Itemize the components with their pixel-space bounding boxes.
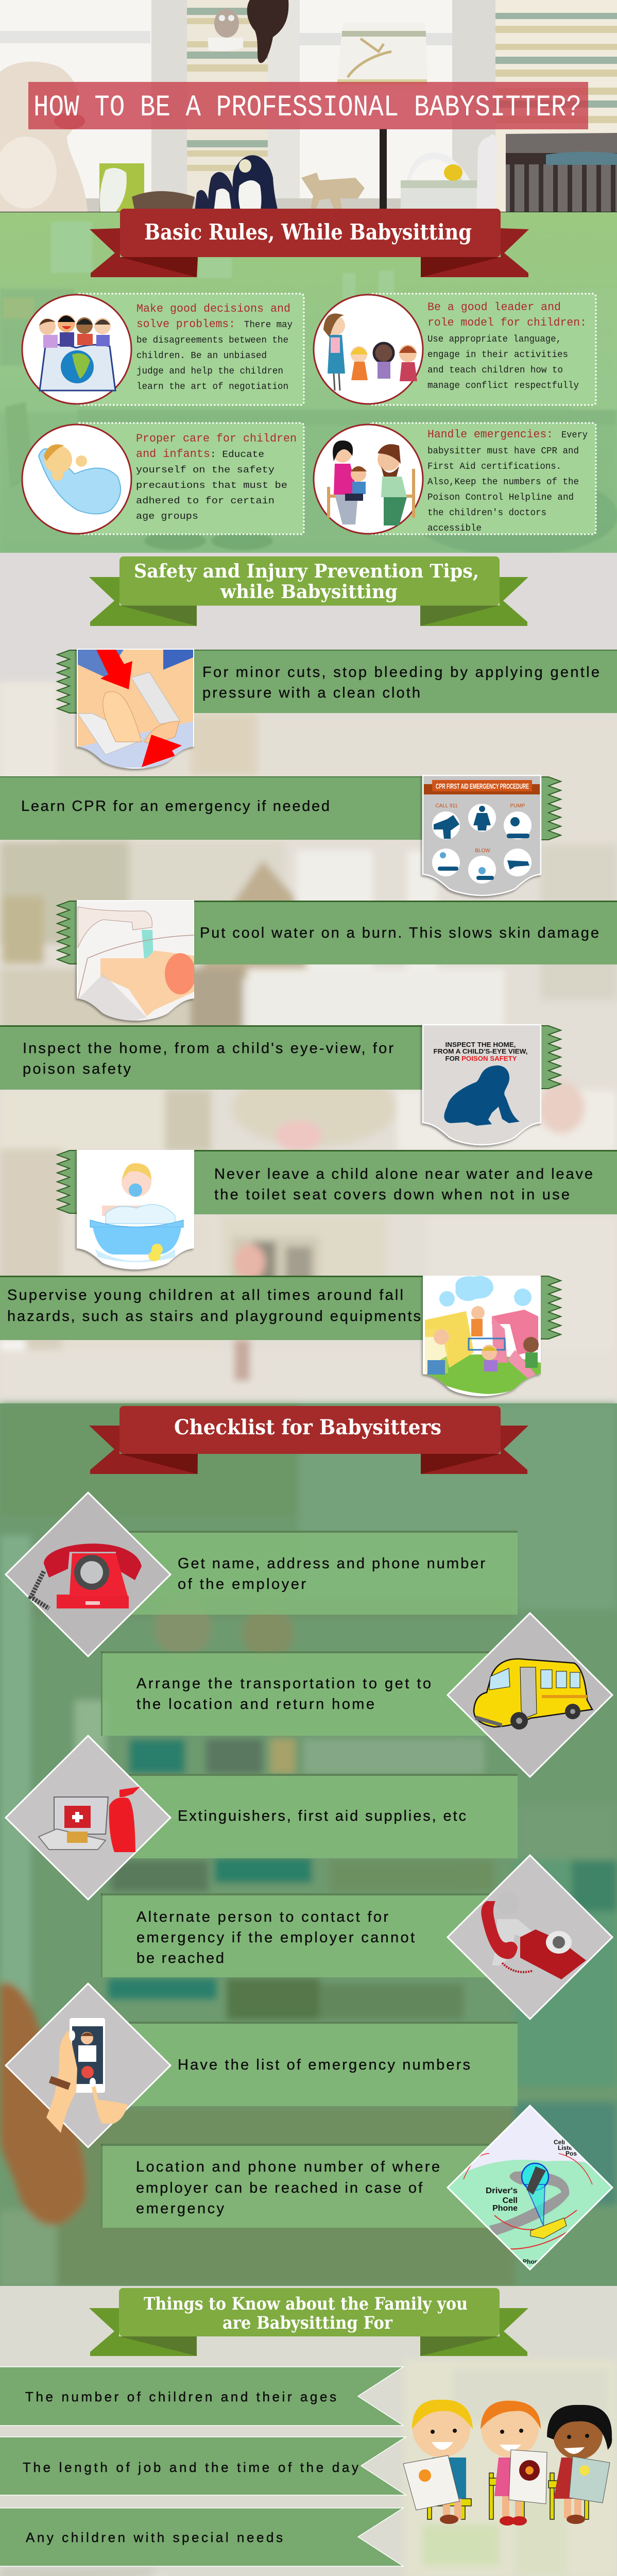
icon: crawling baby card: INSPECT THE HOME,: [445, 1041, 516, 1048]
rule text: Every: [561, 430, 588, 440]
ribbon: basic rules: Basic Rules, While Babysitting: [144, 219, 472, 245]
rule text: yourself on the safety: [136, 465, 275, 476]
section background: checklist: [0, 1403, 617, 2286]
lamp: [337, 23, 427, 212]
icon: cell phone tracking map: Cell: [503, 2196, 518, 2205]
checklist row: alternate contact: be reached: [136, 1950, 224, 1967]
rule text: and infants: [136, 448, 210, 461]
tip: minor cuts: For minor cuts, stop bleeding by applying gentle: [202, 664, 599, 681]
polar bear toy: [0, 62, 88, 212]
icon: crawling baby card: FOR POISON SAFETY: [445, 1055, 517, 1062]
ribbon: safety tips: Safety and Injury Prevention Tips,: [134, 561, 479, 582]
rule text: Handle emergencies:: [427, 428, 553, 441]
checklist row: alternate contact: [101, 1855, 612, 2019]
family bar: children: [0, 2367, 403, 2426]
icon: CPR procedure card: [423, 775, 541, 895]
icon: cell phone tracking map: Cell: [554, 2139, 565, 2146]
icon: CPR procedure card: CALL 911: [435, 803, 458, 809]
rule text: the children's doctors: [427, 508, 546, 518]
panel: be a good leader: [314, 294, 596, 405]
icon: children with globe book: [22, 295, 131, 404]
checklist row: employer details: of the employer: [178, 1576, 306, 1592]
tip: poison safety: [0, 1025, 561, 1145]
icon: cell phone tracking map: [443, 2106, 617, 2272]
rule text: There may: [244, 320, 293, 330]
panel: proper care: [22, 423, 304, 534]
hero photo: nursery window: [0, 0, 617, 212]
rule text: [427, 428, 588, 534]
checklist row: emergency numbers: [6, 1984, 518, 2147]
icon: figure with red phone: [448, 1855, 612, 2019]
family bar: job length: The length of job and the time of the day: [23, 2460, 358, 2475]
checklist row: alternate contact: Alternate person to contact for: [136, 1909, 388, 1925]
rule text: Be a good leader and: [427, 301, 561, 314]
icon: swaddled baby: [22, 425, 131, 534]
crib: [506, 133, 617, 212]
rule text: judge and help the children: [136, 366, 283, 377]
icon: cell phone tracking map: Phone: [492, 2204, 518, 2213]
rule text: age groups: [136, 512, 198, 522]
left stack of toys: [99, 163, 195, 212]
ribbon: checklist: Checklist for Babysitters: [174, 1415, 441, 1439]
tip: minor cuts: [57, 649, 617, 769]
icon: hand with phone calling doctor: [6, 1984, 170, 2147]
rule text: and teach children how to: [427, 365, 563, 376]
checklist row: transportation: the location and return home: [136, 1696, 374, 1713]
icon: cell phone tracking map: Liste: [558, 2144, 572, 2151]
checklist row: alternate contact: emergency if the employer cannot: [136, 1929, 415, 1946]
checklist row: employer details: [6, 1493, 518, 1656]
rule text: be disagreements between the: [136, 335, 288, 346]
icon: cell phone tracking map: Pos: [565, 2150, 577, 2157]
rule text: solve problems:: [136, 318, 235, 331]
rule text: children. Be an unbiased: [136, 351, 267, 361]
family bar: special needs: [0, 2508, 403, 2566]
icon: bandaging hand card: [77, 649, 194, 769]
rule text: Poison Control Helpline and: [427, 493, 574, 503]
rule text: Use appropriate language,: [427, 334, 561, 345]
tip: poison safety: Inspect the home, from a child's eye-view, for: [23, 1040, 393, 1057]
section background: safety tips: [0, 553, 617, 1403]
ribbon: family: Things to Know about the Family you: [144, 2294, 468, 2314]
family bar: children: The number of children and their ages: [25, 2389, 336, 2404]
rule text: adhered to for certain: [136, 496, 275, 506]
rule text: Proper care for children: [136, 432, 297, 445]
icon: first aid kit and extinguisher: [6, 1736, 170, 1900]
rule text: babysitter must have CPR and: [427, 446, 579, 456]
section background: basic rules: [0, 212, 617, 556]
illustration: three children with drawings: [403, 2400, 612, 2526]
rule text: engage in their activities: [427, 350, 568, 360]
icon: school bus: [448, 1613, 612, 1777]
ribbon: family: [89, 2288, 528, 2356]
basket and duck: [401, 152, 478, 212]
icon: crawling baby card: [423, 1025, 541, 1145]
tip: CPR: [0, 775, 561, 895]
tip: burn: Put cool water on a burn. This slows skin damage: [200, 925, 599, 941]
monkey toy: [247, 0, 288, 63]
tip: poison safety: poison safety: [23, 1061, 131, 1077]
tip: burn: [57, 900, 617, 1021]
icon: crawling baby card: FROM A CHILD'S-EYE VIEW,: [434, 1047, 527, 1055]
rabbit toy: [476, 134, 497, 212]
checklist row: emergency numbers: Have the list of emergency numbers: [178, 2057, 470, 2073]
rule text: precautions that must be: [136, 481, 287, 491]
panel: handle emergencies: [314, 423, 596, 534]
family bar: special needs: Any children with special needs: [26, 2530, 283, 2545]
tip: minor cuts: pressure with a clean cloth: [202, 685, 420, 701]
checklist row: employer details: Get name, address and phone number: [178, 1555, 485, 1572]
tip: fall hazards: Supervise young children at all times around fall: [7, 1287, 403, 1303]
section background: family: [0, 2286, 617, 2576]
ribbon: family: are Babysitting For: [222, 2313, 393, 2333]
icon: CPR procedure card: PUMP: [510, 803, 525, 809]
panel: make good decisions: [22, 294, 304, 405]
icon: doctor with mother and child: [314, 425, 423, 534]
icon: red telephone: [6, 1493, 170, 1656]
rule text: manage conflict respectfully: [427, 381, 579, 391]
checklist row: transportation: [101, 1613, 612, 1777]
penguins: [195, 155, 278, 212]
ribbon: safety tips: while Babysitting: [220, 581, 398, 603]
rule text: [427, 301, 587, 391]
ribbon: safety tips: [89, 556, 528, 626]
icon: cell phone tracking map: Phon: [523, 2258, 538, 2265]
rule text: [136, 432, 297, 522]
checklist row: employer location: employer can be reached in case of: [136, 2180, 423, 2196]
icon: playground card: [423, 1276, 541, 1397]
rule text: Also,Keep the numbers of the: [427, 477, 579, 487]
owl toy on shelf: [208, 9, 243, 51]
rule text: accessible: [427, 523, 482, 534]
icon: cell phone tracking map: Driver's: [486, 2187, 518, 2195]
checklist row: extinguishers: [6, 1736, 518, 1900]
icon: CPR procedure card: BLOW: [475, 848, 490, 854]
checklist row: employer location: emergency: [136, 2200, 225, 2217]
family bar: job length: [0, 2437, 406, 2495]
icon: teacher and pupils: [314, 295, 423, 404]
checklist row: transportation: Arrange the transportation to get to: [136, 1675, 431, 1692]
ribbon: basic rules: [90, 209, 529, 277]
goat toy: [301, 173, 365, 212]
checklist row: extinguishers: Extinguishers, first aid supplies, etc: [178, 1808, 466, 1824]
icon: baby in bathtub card: [77, 1150, 194, 1269]
tip: water safety: Never leave a child alone near water and leave: [214, 1166, 593, 1182]
tip: water safety: the toilet seat covers down when not in use: [214, 1187, 570, 1203]
icon: CPR procedure card: CPR FIRST AID EMERGENCY PROCEDURE: [436, 782, 529, 791]
tip: fall hazards: hazards, such as stairs and playground equipments: [7, 1308, 421, 1325]
rule text: Make good decisions and: [136, 302, 290, 315]
tip: fall hazards: [0, 1276, 561, 1397]
icon: cool water card: [77, 900, 196, 1021]
rule text: role model for children:: [427, 316, 587, 329]
tip: water safety: [57, 1150, 617, 1269]
rule text: First Aid certifications.: [427, 462, 561, 472]
rule text: [136, 302, 293, 392]
checklist row: employer location: Location and phone number of where: [136, 2159, 440, 2175]
ribbon: checklist: [89, 1406, 528, 1474]
checklist row: employer location: [101, 2106, 617, 2272]
title banner: [28, 82, 588, 129]
tip: CPR: Learn CPR for an emergency if needed: [21, 798, 330, 815]
rule text: : Educate: [210, 450, 264, 460]
rule text: learn the art of negotiation: [136, 382, 288, 392]
